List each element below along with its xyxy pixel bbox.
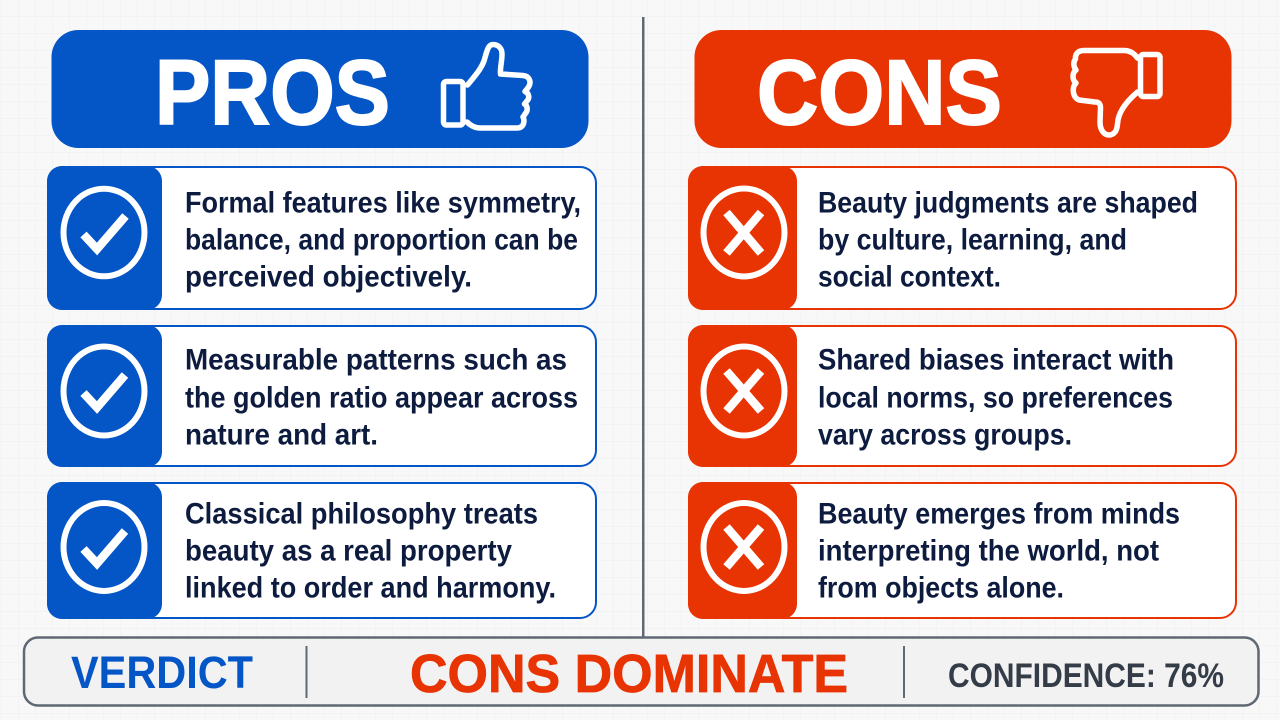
confidence value: CONFIDENCE: 76% <box>948 657 1224 695</box>
con text 2 <box>818 344 1174 452</box>
pro text 2 <box>185 344 578 452</box>
verdict label: VERDICT <box>71 647 253 698</box>
pro text 1: balance, and proportion can be <box>185 224 578 256</box>
con text 1: Beauty judgments are shaped <box>818 186 1198 220</box>
verdict result: CONS DOMINATE <box>410 644 848 704</box>
con card 1 <box>688 166 1236 310</box>
pro card 2 <box>47 325 596 467</box>
icon: check circle <box>64 189 144 276</box>
con text 1: by culture, learning, and <box>818 224 1127 256</box>
pro text 2: Measurable patterns such as <box>185 344 567 376</box>
cons header banner <box>694 30 1232 148</box>
panel: cons <box>688 30 1236 619</box>
heading: PROS: PROS <box>155 42 390 144</box>
icon: x circle <box>704 503 784 591</box>
pro card 3 <box>47 482 596 619</box>
icon: check circle <box>64 503 144 591</box>
pro text 2: nature and art. <box>185 418 378 452</box>
con text 2: local norms, so preferences <box>818 382 1173 414</box>
con text 1: social context. <box>818 260 1001 294</box>
pro text 3: Classical philosophy treats <box>185 498 538 530</box>
icon: x circle <box>704 346 784 436</box>
con text 3: interpreting the world, not <box>818 534 1159 568</box>
icon: thumbs up <box>444 44 530 128</box>
con text 3: from objects alone. <box>818 572 1064 604</box>
pro card 1 <box>47 166 596 310</box>
heading: CONS: CONS <box>757 42 1002 144</box>
con text 1 <box>818 186 1198 294</box>
verdict bar <box>24 638 1258 706</box>
pro text 1: perceived objectively. <box>185 260 472 294</box>
icon: thumbs down <box>1073 50 1160 135</box>
con text 2: vary across groups. <box>818 418 1072 452</box>
icon: check circle <box>64 346 144 436</box>
pro text 1: Formal features like symmetry, <box>185 186 581 220</box>
con card 2 <box>688 325 1236 467</box>
con text 3 <box>818 498 1180 604</box>
pro text 2: the golden ratio appear across <box>185 382 578 414</box>
pro text 1 <box>185 186 581 294</box>
pros header banner <box>52 30 588 148</box>
pro text 3: linked to order and harmony. <box>185 572 556 604</box>
pro text 3 <box>185 498 556 604</box>
con text 3: Beauty emerges from minds <box>818 498 1180 530</box>
con text 2: Shared biases interact with <box>818 344 1174 376</box>
icon: x circle <box>704 188 784 276</box>
con card 3 <box>688 482 1236 619</box>
panel: pros <box>47 30 596 619</box>
pro text 3: beauty as a real property <box>185 534 512 568</box>
